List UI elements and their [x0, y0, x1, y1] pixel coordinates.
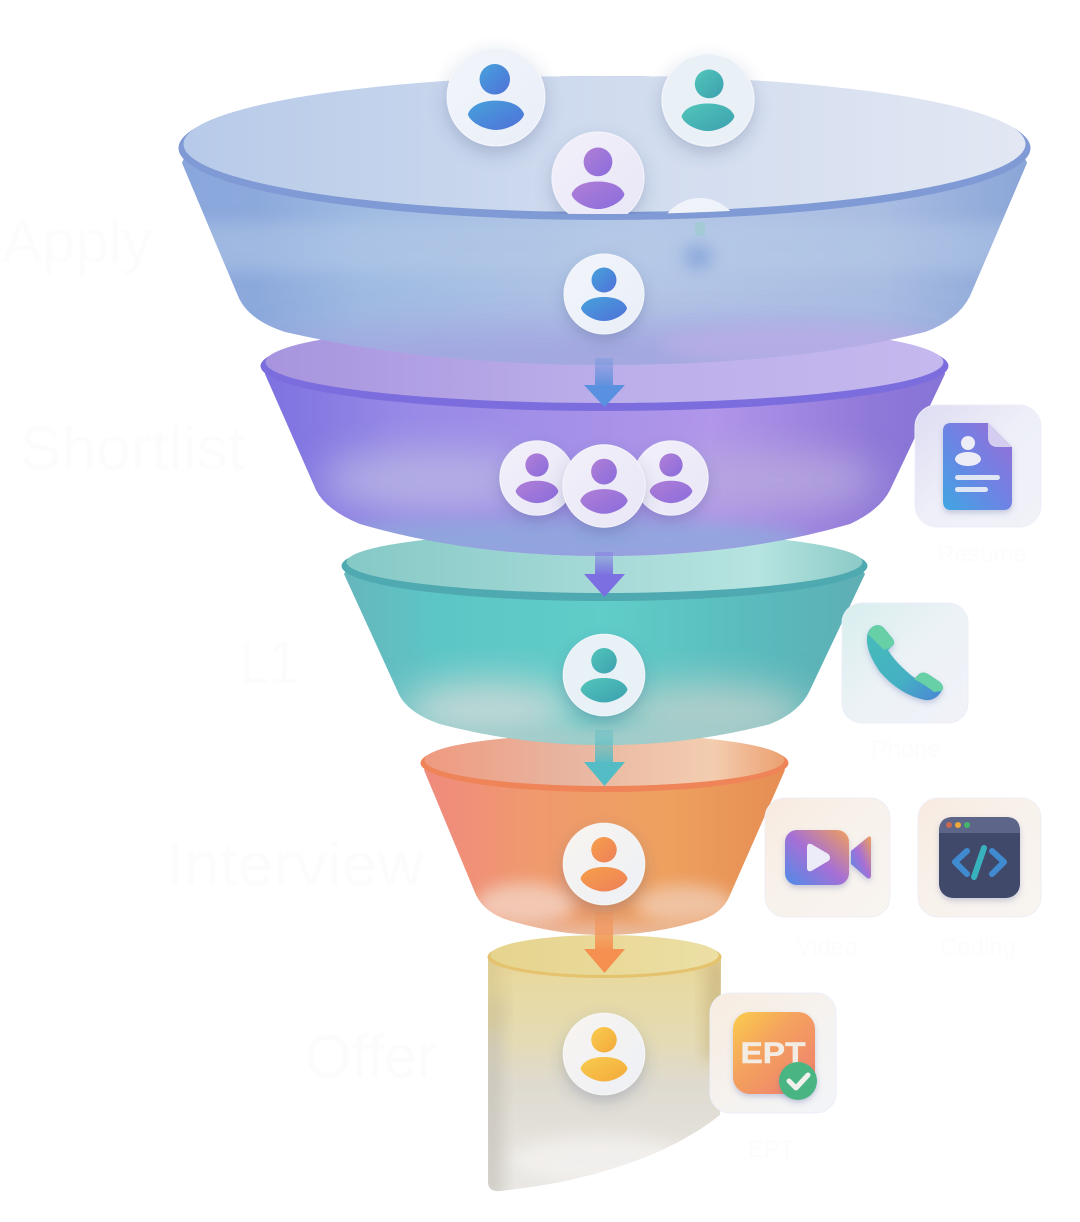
badge: yellow offer candidate: [563, 1013, 645, 1095]
badge: blue applicant in tier 1: [564, 254, 644, 334]
card: phone: [842, 603, 968, 723]
card: resume: [915, 405, 1041, 527]
arrow: interview to offer: [584, 912, 625, 973]
shortlist badge group: [500, 441, 708, 527]
label: Video: Video: [797, 934, 857, 961]
label: Resume: Resume: [937, 541, 1027, 568]
badge: teal L1 candidate: [563, 634, 645, 716]
badge: purple applicant: [552, 132, 644, 224]
badge: purple centre: [563, 445, 645, 527]
label: Coding: Coding: [940, 934, 1016, 961]
card: EPT: [710, 993, 836, 1113]
stage label: Interview: Interview: [166, 831, 425, 898]
badge: teal applicant top: [662, 54, 754, 146]
label: Phone: Phone: [871, 736, 941, 763]
icon: code window: [939, 817, 1020, 898]
badge: blue applicant top: [447, 48, 545, 146]
badge: orange interview candidate: [563, 823, 645, 905]
stage label: L1: L1: [240, 629, 298, 696]
stage label: Offer: Offer: [305, 1023, 437, 1090]
icon: EPT tile: [733, 1012, 815, 1094]
EPT tile lettering: EPT: [740, 1037, 806, 1070]
funnel tier 5: offer cylinder: [488, 935, 722, 1192]
stage label: Apply: Apply: [2, 208, 152, 275]
badge: purple left: [500, 441, 574, 515]
card: video: [765, 798, 890, 917]
icon: phone handset: [867, 625, 943, 700]
arrow: apply to shortlist: [584, 358, 625, 407]
arrow: shortlist to L1: [584, 552, 625, 597]
funnel tier 3: L1 phone screen: [342, 540, 868, 745]
stage label: Shortlist: Shortlist: [20, 415, 245, 482]
funnel tier 1: apply: [178, 76, 1030, 365]
arrow: L1 to interview: [584, 730, 625, 786]
card: coding: [918, 798, 1041, 917]
funnel tier 2: shortlist: [260, 340, 948, 556]
badge: teal applicant sinking: [668, 198, 730, 214]
badge: purple right: [634, 441, 708, 515]
applicant badges inside the top rim: [544, 132, 730, 214]
smudge behind glass: [683, 245, 713, 269]
icon: resume document: [943, 423, 1012, 510]
label: EPT: EPT: [748, 1136, 795, 1163]
funnel tier 4: interview: [420, 738, 788, 935]
icon: green check: [779, 1062, 817, 1100]
icon: video camera: [785, 830, 871, 885]
